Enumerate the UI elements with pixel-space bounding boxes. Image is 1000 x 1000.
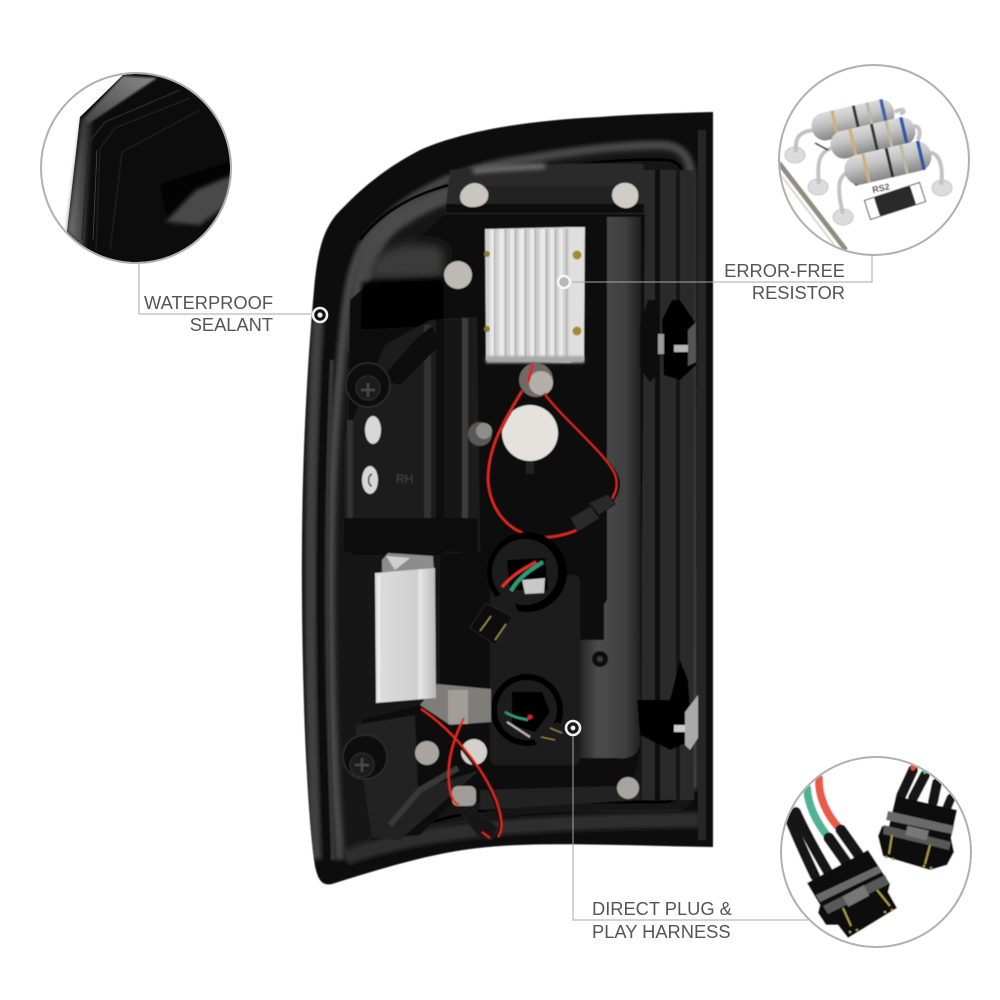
mounting screw, upper xyxy=(346,326,440,407)
callout: error-free resistor xyxy=(558,60,975,303)
central column xyxy=(580,217,641,758)
resistor legs xyxy=(796,110,942,214)
bottom ledge xyxy=(480,785,640,810)
callout: waterproof sealant xyxy=(40,60,327,335)
lower wiring and connector xyxy=(421,709,502,840)
left upper gloss xyxy=(368,244,444,280)
circuit trace xyxy=(814,142,860,186)
lower-left cavity xyxy=(350,555,440,720)
secondary resistor module xyxy=(375,553,436,703)
leader line xyxy=(572,255,872,282)
marker dot xyxy=(558,276,570,288)
resistor 2 xyxy=(830,116,916,160)
label: RESISTOR xyxy=(752,282,845,303)
marker dot xyxy=(566,721,580,735)
harness wires xyxy=(788,765,951,876)
inner cavity xyxy=(349,213,645,840)
left panel block xyxy=(344,317,480,553)
callout: direct plug and play harness xyxy=(566,721,975,950)
top bar xyxy=(445,163,645,214)
mounting screw, lower xyxy=(343,735,387,779)
lamp housing xyxy=(295,105,720,895)
bottom rim band xyxy=(345,820,700,858)
error-free resistor module (finned heat sink) xyxy=(484,227,585,363)
moulded date marks xyxy=(362,416,381,494)
label: SEALANT xyxy=(190,314,273,335)
board label: RS2 xyxy=(871,182,891,195)
upper wire socket and harness connector xyxy=(470,532,567,645)
large round lens plug xyxy=(502,400,620,525)
connector B xyxy=(878,796,957,870)
surface-mount chip xyxy=(864,183,926,219)
resistor 1 xyxy=(811,98,895,141)
label: PLAY HARNESS xyxy=(592,921,731,942)
resistor 3 xyxy=(844,140,932,185)
label: DIRECT PLUG & xyxy=(592,898,732,919)
right vertical ribs xyxy=(642,170,694,800)
detail circle: resistors on circuit board xyxy=(775,60,975,260)
detail circle: sealant close-up xyxy=(40,72,232,264)
tail light: rear view photo illustration xyxy=(295,105,720,895)
leader line xyxy=(139,262,311,314)
sealant blobs and plugs xyxy=(415,183,639,806)
board pads xyxy=(785,147,952,225)
red and black wiring, upper loop xyxy=(488,364,618,537)
small moulded screw xyxy=(592,651,608,667)
marker dot xyxy=(313,308,327,322)
connector A xyxy=(807,850,897,938)
lower wire socket and connector xyxy=(491,674,566,749)
right mounting clips xyxy=(637,300,698,750)
RH moulded marking: RH xyxy=(396,472,413,486)
leader line xyxy=(573,736,808,920)
label: WATERPROOF xyxy=(144,292,273,313)
detail circle: harness connectors xyxy=(775,750,975,950)
label: ERROR-FREE xyxy=(724,260,845,281)
